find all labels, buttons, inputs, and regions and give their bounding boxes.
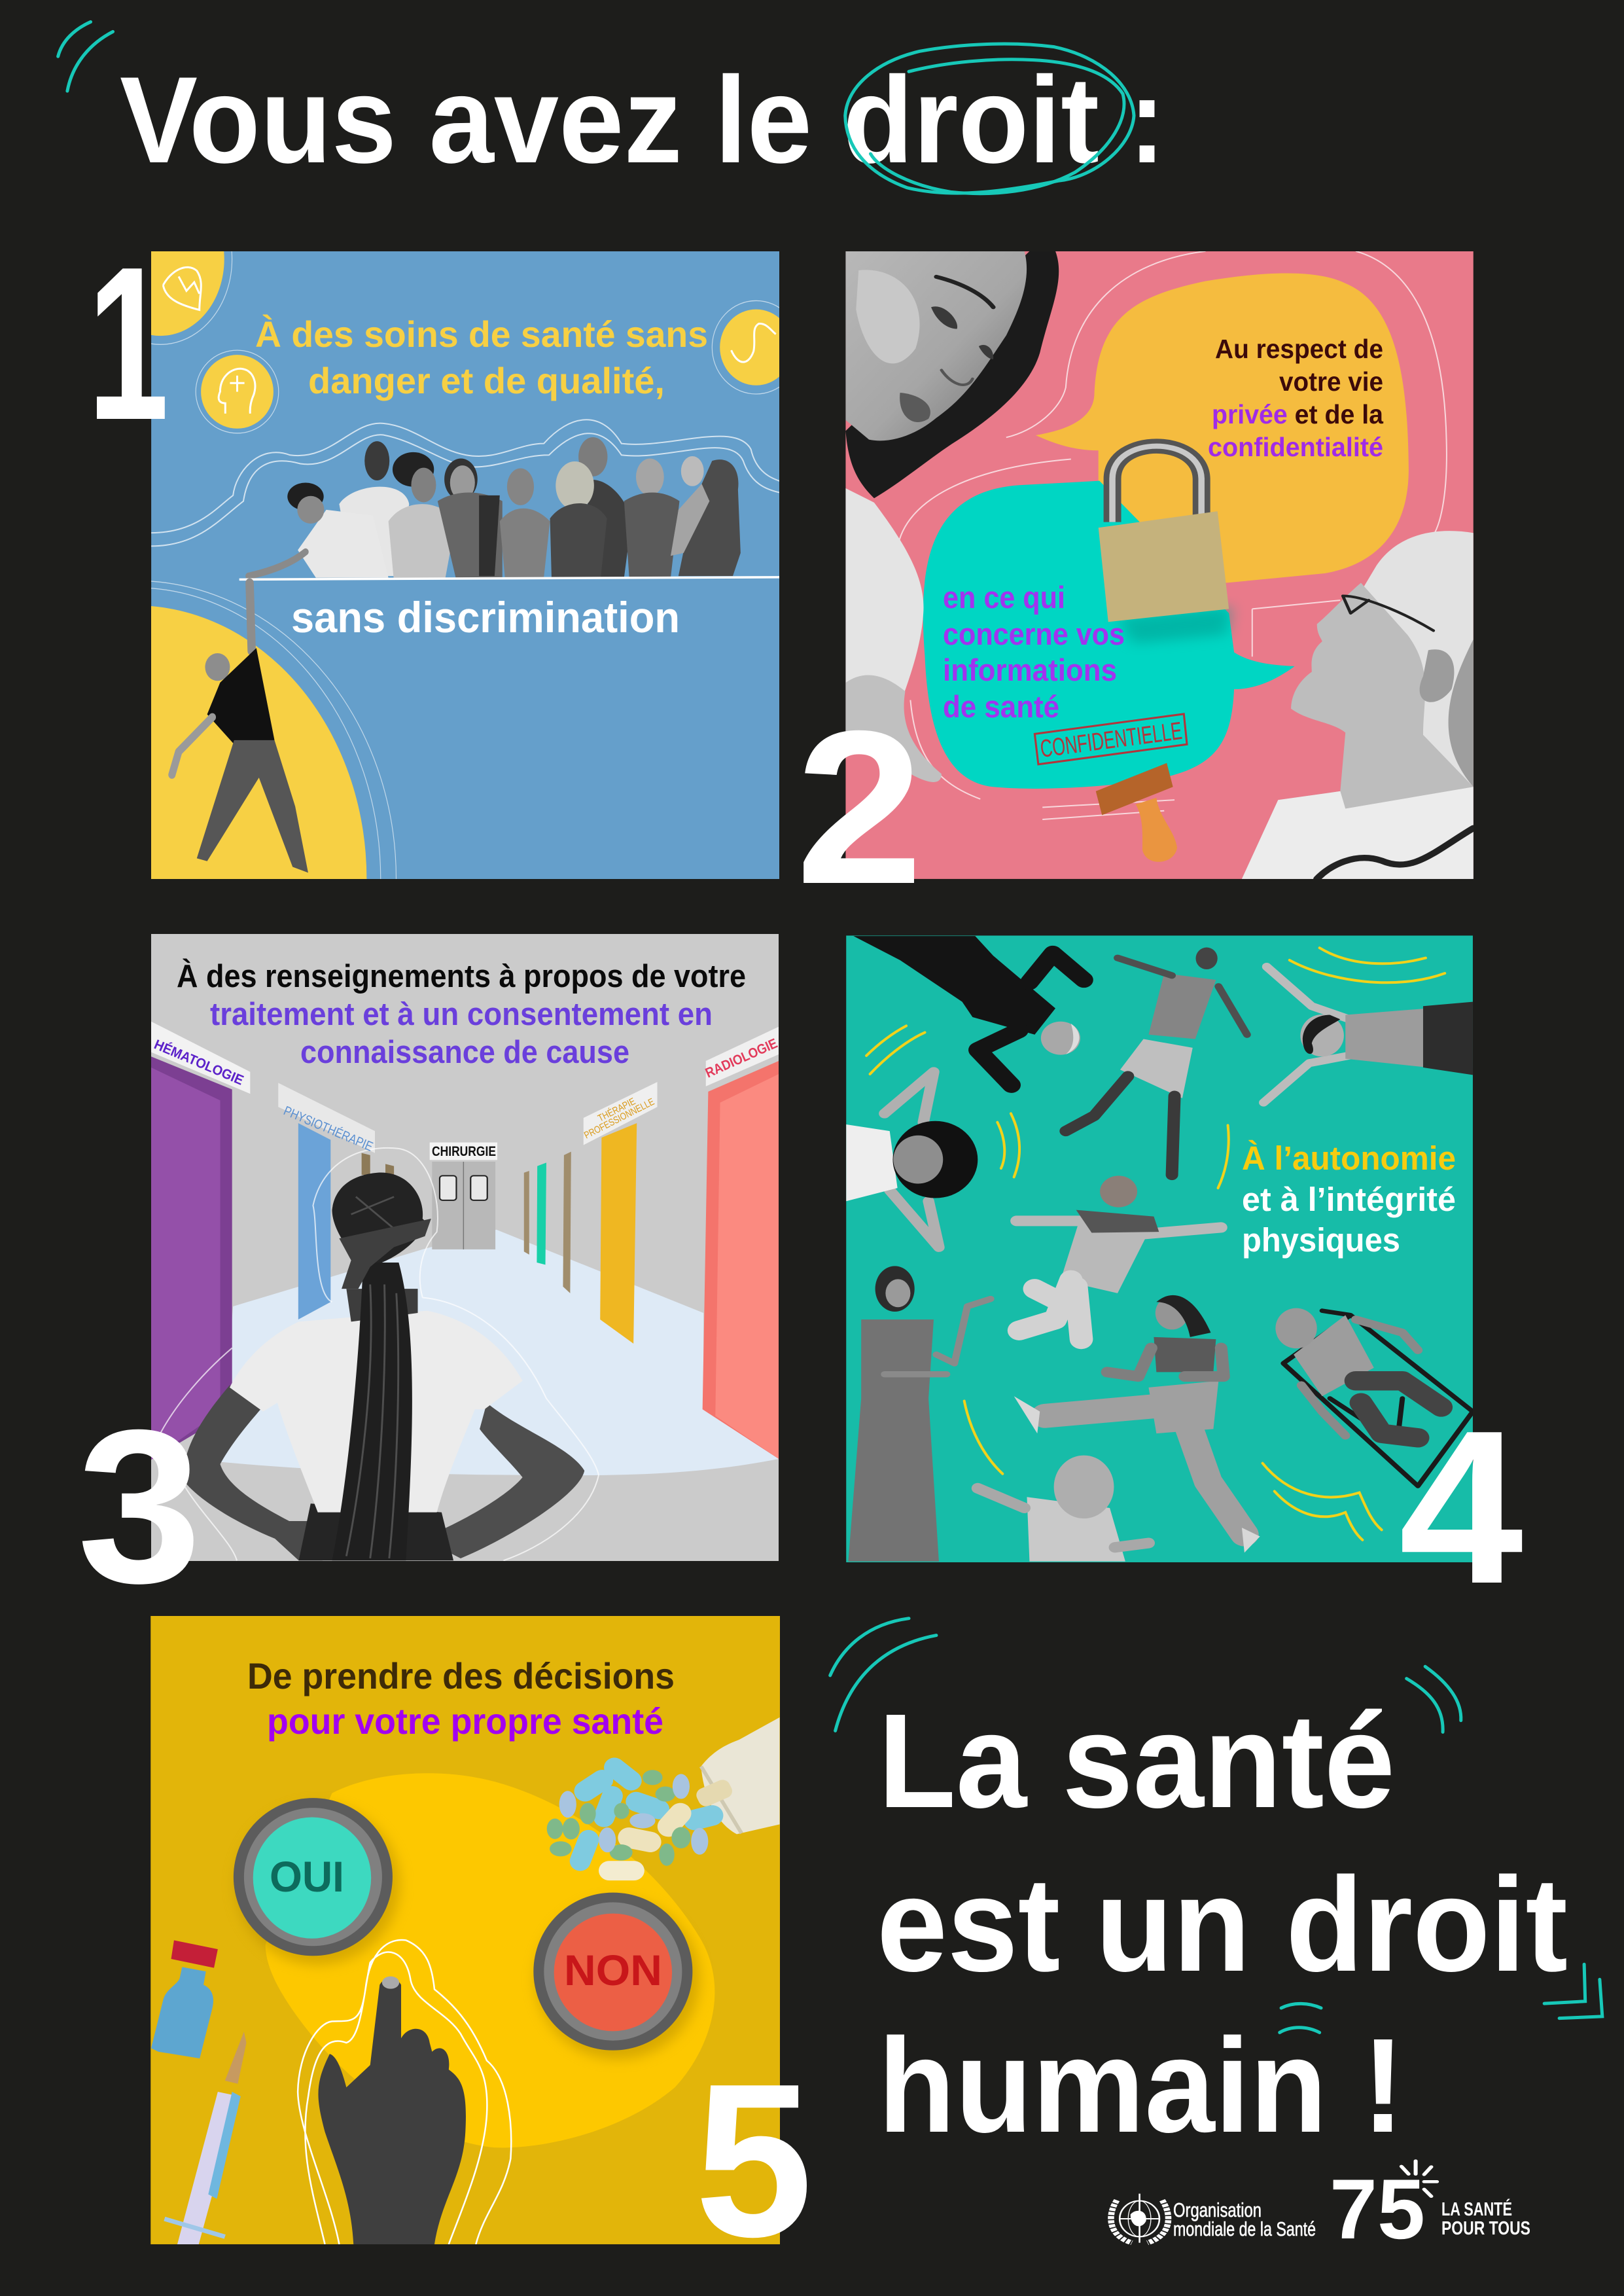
closing statement: La santé est un droit humain bbox=[877, 1686, 1568, 2161]
panel 4 background bbox=[846, 935, 1473, 1562]
panel 5 heading: De prendre des décisions bbox=[247, 1655, 675, 1696]
panel 3 heading: connaissance de cause bbox=[300, 1035, 629, 1070]
boy in wheelchair bbox=[1275, 1308, 1473, 1486]
closing statement: La santé est un droit humain: humain ! bbox=[878, 2011, 1404, 2161]
panel 2 background bbox=[845, 251, 1474, 879]
closing statement: La santé est un droit humain: La santé bbox=[878, 1686, 1395, 1836]
jumping man bbox=[1066, 948, 1247, 1175]
big yellow circle bbox=[151, 581, 397, 879]
icon: head circle bbox=[196, 350, 279, 433]
white shirt and hand bbox=[845, 488, 942, 782]
panel 1 subheading: sans discrimination bbox=[291, 593, 680, 641]
logo: organisation name bbox=[1173, 2198, 1316, 2240]
closing statement: La santé est un droit humain: est un droit bbox=[877, 1850, 1568, 2000]
button oui bbox=[234, 1798, 400, 1965]
panel 4: autonomie et intégrité physiques bbox=[846, 935, 1473, 1562]
number 4: 4 bbox=[1399, 1385, 1525, 1629]
woman outline bbox=[156, 1148, 599, 1560]
panel 2 yellow bubble text: Au respect de bbox=[1215, 334, 1383, 364]
panel 3: renseignements et consentement bbox=[151, 934, 780, 1562]
panel 4 text: À l’autonomie bbox=[1242, 1139, 1456, 1177]
vial bbox=[151, 1940, 218, 2058]
wave outlines bbox=[151, 420, 779, 546]
panel 3 heading: traitement et à un consentement en bbox=[210, 997, 713, 1032]
panel 2 teal bubble text: en ce qui bbox=[943, 580, 1065, 615]
door sign labels: CHIRURGIE bbox=[432, 1144, 496, 1159]
woman with afro bbox=[846, 1072, 978, 1247]
padlock bbox=[1099, 446, 1231, 643]
ledge line bbox=[239, 577, 779, 579]
woman in sari bbox=[848, 1266, 991, 1562]
panel 3 heading bbox=[177, 959, 746, 1070]
panel 2 yellow bubble text: confidentialité bbox=[1208, 432, 1383, 462]
pill bottle bbox=[694, 1717, 780, 1834]
accent strokes near title bbox=[58, 22, 113, 91]
door: hématologie bbox=[151, 1022, 250, 1460]
door sign labels: PROFESSIONNELLE bbox=[582, 1096, 656, 1141]
panel 2 yellow bubble text: privée et de la bbox=[1212, 399, 1384, 429]
syringe bbox=[164, 2032, 247, 2244]
corridor doors bbox=[362, 1152, 571, 1293]
outline strokes bbox=[898, 251, 1447, 819]
panel 2 teal bubble text: informations bbox=[943, 653, 1117, 687]
panel 4 text bbox=[1242, 1139, 1456, 1259]
icon: stethoscope circle bbox=[712, 300, 779, 395]
man in black bbox=[853, 936, 1084, 1085]
door sign labels: HÉMATOLOGIE bbox=[152, 1037, 245, 1088]
logo: 75 years: 75 bbox=[1330, 2161, 1425, 2257]
speech bubble teal bbox=[923, 481, 1295, 789]
panel 2 teal bubble text bbox=[943, 580, 1125, 724]
panel 2 yellow bubble text bbox=[1208, 334, 1384, 462]
title: Vous avez le droit bbox=[120, 51, 1165, 188]
logo: organisation name: mondiale de la Santé bbox=[1173, 2217, 1316, 2240]
door sign labels: PHYSIOTHÉRAPIE bbox=[281, 1103, 375, 1155]
rubber stamp bbox=[1096, 763, 1177, 862]
door: physiothérapie bbox=[278, 1083, 375, 1319]
older woman bottom right bbox=[1242, 531, 1474, 879]
group of people on the ledge bbox=[249, 437, 741, 578]
yellow blob bbox=[266, 1773, 715, 2147]
logo: la santé pour tous: LA SANTÉ bbox=[1441, 2198, 1512, 2220]
panel 3 heading: À des renseignements à propos de votre bbox=[177, 959, 746, 994]
logo: la santé pour tous bbox=[1441, 2198, 1530, 2239]
door sign labels: RADIOLOGIE bbox=[703, 1036, 780, 1081]
panel 4 text: et à l’intégrité bbox=[1242, 1181, 1456, 1218]
panel 2: vie privée et confidentialité bbox=[845, 251, 1474, 879]
speech bubble yellow bbox=[1036, 273, 1409, 583]
yellow motion lines bbox=[866, 948, 1445, 1540]
panel 1 background bbox=[151, 251, 779, 879]
dancing woman bbox=[1014, 1295, 1260, 1552]
number 2: 2 bbox=[796, 685, 923, 929]
panel 2 yellow bubble text: votre vie bbox=[1279, 367, 1383, 397]
panel 1 heading: danger et de qualité, bbox=[308, 360, 665, 401]
woman seen from behind bbox=[184, 1173, 584, 1560]
woman in hijab bbox=[1017, 1175, 1221, 1339]
logo: la santé pour tous: POUR TOUS bbox=[1441, 2218, 1530, 2239]
button non bbox=[533, 1893, 699, 2059]
door: radiologie bbox=[703, 1027, 779, 1459]
title: Vous avez le droit: : bbox=[1129, 51, 1165, 188]
logo: WHO emblem bbox=[1111, 2194, 1169, 2243]
panel 5 subheading: pour votre propre santé bbox=[267, 1700, 663, 1742]
panel 2 teal bubble text: concerne vos bbox=[943, 617, 1125, 651]
panel 1: soins de santé sans discrimination bbox=[0, 174, 800, 1177]
logo: organisation name: Organisation bbox=[1173, 2198, 1262, 2221]
panel 5 background bbox=[150, 1616, 780, 2244]
hand outline bbox=[298, 1940, 511, 2244]
title: Vous avez le droit: Vous avez le bbox=[120, 51, 812, 188]
hand-drawn circle around droit bbox=[845, 44, 1134, 194]
pills bbox=[547, 1753, 726, 1880]
panel 1 heading bbox=[255, 314, 708, 401]
non label: NON bbox=[564, 1946, 662, 1994]
number 1: 1 bbox=[88, 221, 169, 465]
door sign labels bbox=[152, 1036, 780, 1159]
panel 4 text: physiques bbox=[1242, 1221, 1400, 1259]
icon: heart circle bbox=[151, 251, 233, 345]
hanging man bbox=[172, 583, 308, 872]
panel 2 teal bubble text: de santé bbox=[943, 689, 1059, 724]
number 3: 3 bbox=[77, 1384, 202, 1628]
door sign labels: THÉRAPIE bbox=[596, 1096, 637, 1124]
pointing hand bbox=[318, 1977, 466, 2244]
panel 1 heading: À des soins de santé sans bbox=[255, 314, 708, 355]
stamp mark frame bbox=[1034, 714, 1187, 764]
panel 3 background bbox=[151, 934, 780, 1562]
woman top left bbox=[845, 251, 1059, 498]
girl with arms spread bbox=[1263, 967, 1473, 1103]
panel 5: prendre des décisions bbox=[150, 1616, 780, 2244]
oui label: OUI bbox=[270, 1852, 344, 1901]
door: chirurgie bbox=[430, 1143, 497, 1249]
corridor floor bbox=[221, 1230, 779, 1475]
baby bbox=[978, 1456, 1148, 1562]
door: thérapie professionnelle bbox=[584, 1082, 658, 1344]
title: Vous avez le droit: droit bbox=[843, 51, 1099, 188]
number 5: 5 bbox=[695, 2038, 813, 2282]
stamp label: CONFIDENTIELLE bbox=[1038, 717, 1184, 763]
teal accent strokes around closing statement bbox=[830, 1619, 1602, 2032]
